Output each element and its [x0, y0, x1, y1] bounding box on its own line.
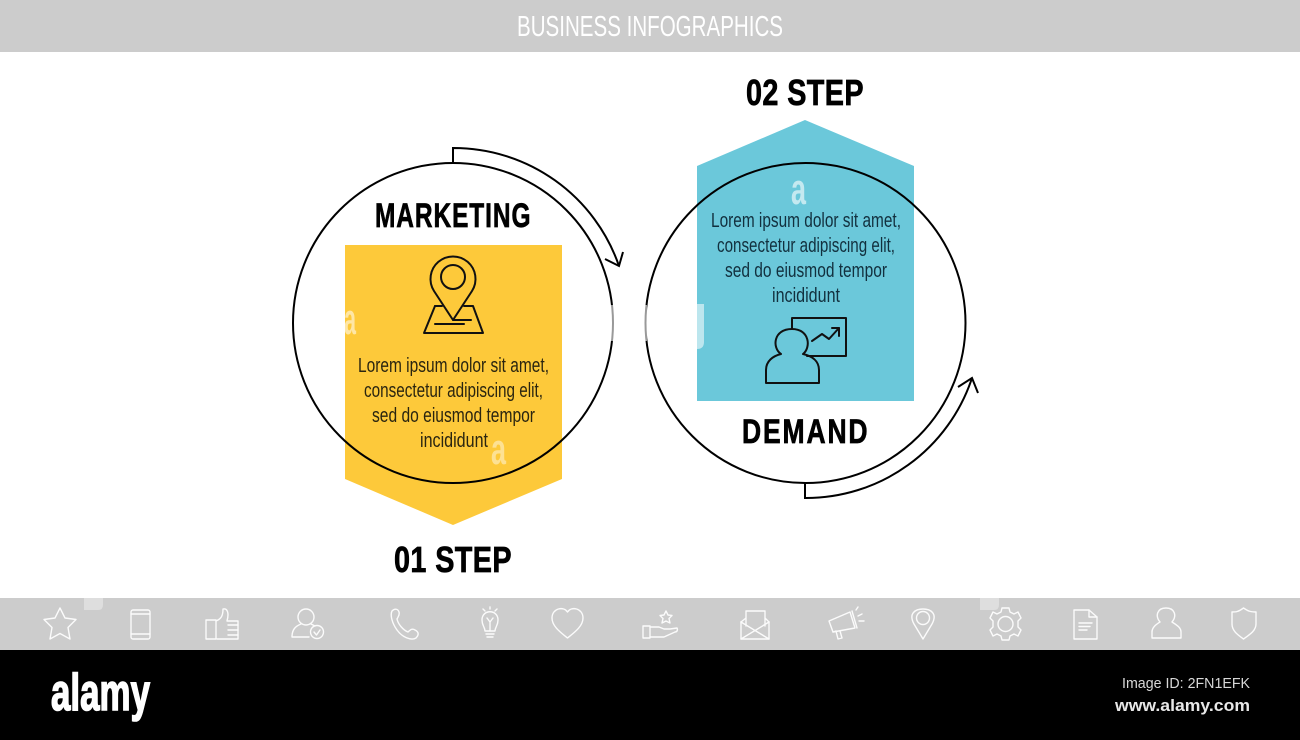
icon: open envelope [741, 611, 769, 639]
icon: hand with star [643, 611, 677, 638]
circle outline [293, 163, 613, 483]
watermark ghosts: a [791, 165, 806, 214]
icon: star [44, 608, 76, 639]
body text: marketing: incididunt [420, 429, 488, 452]
icon: heart [552, 609, 583, 638]
icon: megaphone [829, 607, 864, 639]
watermark ghosts: a [344, 295, 356, 344]
watermark fragments on bar [84, 598, 999, 610]
icon: user with check [292, 609, 324, 638]
icon: presenter with chart [766, 318, 846, 383]
icon: map pin [424, 256, 483, 333]
watermark ghosts: a [491, 425, 506, 474]
top banner [0, 0, 1300, 52]
logo: alamy: alamy [51, 664, 150, 722]
icon: gear [990, 608, 1021, 640]
body text: demand: Lorem ipsum dolor sit amet, [711, 209, 901, 232]
body text: demand: sed do eiusmod tempor [725, 259, 887, 282]
body text: demand: incididunt [772, 284, 840, 307]
image id: Image ID: 2FN1EFK [1122, 675, 1250, 692]
watermark ghosts [344, 165, 806, 474]
arrow: clockwise back to step 1 [805, 378, 978, 498]
body text: marketing: Lorem ipsum dolor sit amet, [358, 354, 549, 377]
panel: step 2 demand [646, 72, 978, 498]
body text: demand: consectetur adipiscing elit, [717, 234, 895, 257]
icon: light bulb [482, 607, 498, 637]
footer stock bar [0, 650, 1300, 740]
banner title: BUSINESS INFOGRAPHICS [517, 11, 783, 43]
icon: document [1074, 610, 1097, 639]
icon: phone handset [391, 609, 418, 639]
yellow pennant shape [345, 245, 562, 525]
icon: smartphone [131, 610, 150, 639]
icon: shield [1232, 608, 1256, 639]
blue pennant shape [697, 120, 914, 401]
step label 01: 01 STEP [394, 539, 512, 580]
circle outline [646, 163, 966, 483]
body text: demand [711, 209, 901, 307]
icon: thumbs up [206, 609, 238, 639]
body text: marketing: sed do eiusmod tempor [372, 404, 535, 427]
body text: marketing: consectetur adipiscing elit, [364, 379, 543, 402]
step label 02: 02 STEP [746, 72, 864, 113]
arrow: clockwise to step 2 [453, 148, 623, 266]
website: www.alamy.com [1114, 696, 1250, 715]
heading: demand: DEMAND [742, 413, 868, 451]
bottom icon bar [0, 598, 1300, 650]
icon: person [1152, 608, 1181, 638]
panel: step 1 marketing [293, 148, 623, 580]
heading: marketing: MARKETING [375, 197, 531, 235]
icon: location pin [912, 609, 934, 639]
body text: marketing [358, 354, 549, 452]
